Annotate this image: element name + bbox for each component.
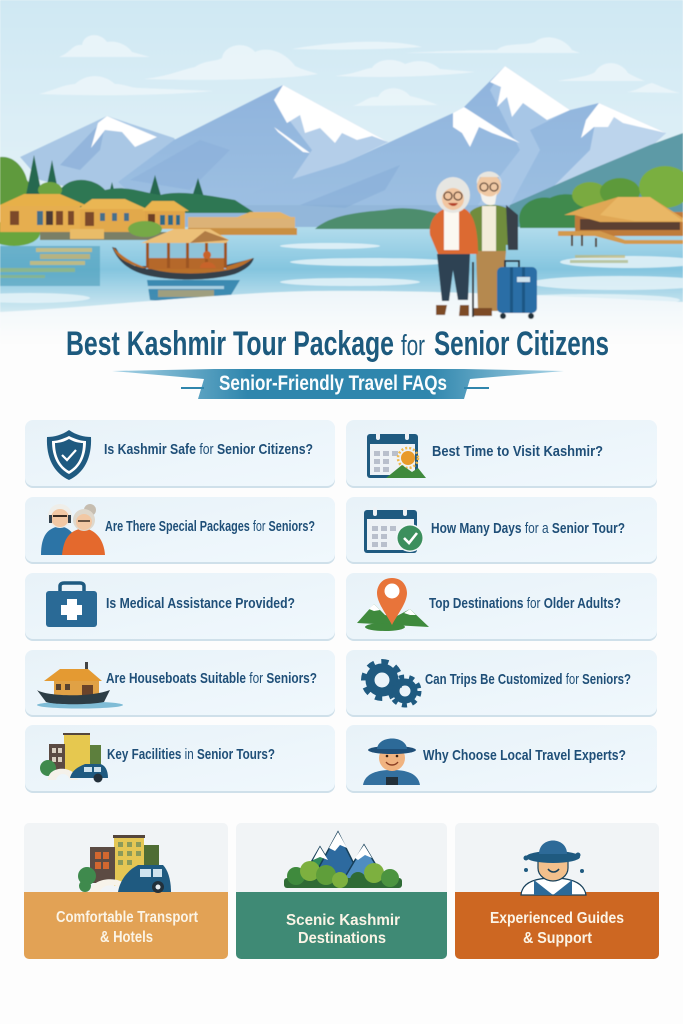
FAQ panel: medical	[25, 573, 335, 641]
icon: senior couple	[41, 504, 105, 555]
icon: houseboat	[37, 662, 123, 708]
hull	[112, 247, 254, 280]
bottom card: transport and hotels	[24, 823, 228, 959]
caption: Comfortable Transport	[56, 909, 199, 926]
tree line	[284, 861, 402, 888]
caption	[286, 912, 400, 947]
FAQ panel: local experts	[346, 725, 657, 793]
stilt house right	[558, 197, 683, 247]
subtitle ribbon	[112, 369, 564, 399]
icon: guide	[363, 738, 420, 785]
icon: hotel and car	[40, 733, 108, 782]
icon: medical kit	[46, 583, 97, 627]
caption: & Hotels	[100, 929, 153, 946]
clouds	[39, 35, 680, 106]
left trees	[0, 155, 255, 246]
lakeside houses	[0, 194, 297, 240]
question: Top Destinations for Older Adults?	[429, 595, 621, 612]
question: How Many Days for a Senior Tour?	[431, 520, 625, 537]
green right hill	[500, 133, 683, 235]
bottom card: scenic destinations	[236, 823, 447, 959]
far houseboat	[188, 212, 297, 235]
woman	[430, 177, 478, 317]
caption	[56, 909, 199, 946]
icon: gears	[364, 662, 419, 705]
shikara boat	[112, 229, 254, 304]
title: Senior Citizens	[434, 325, 609, 363]
suitcase	[497, 261, 537, 319]
question: Are Houseboats Suitable for Seniors?	[106, 670, 317, 687]
bottom card: guides and support	[455, 823, 659, 959]
water highlights	[0, 243, 683, 306]
senior couple	[430, 172, 537, 319]
caption: & Support	[523, 930, 593, 947]
question: Best Time to Visit Kashmir?	[432, 443, 603, 460]
FAQ panel: best time	[346, 420, 657, 488]
right trees	[519, 166, 683, 228]
FAQ panel: customization	[346, 650, 657, 717]
caption: Scenic Kashmir	[286, 912, 400, 929]
icon: hotel and car	[78, 835, 171, 893]
far shore	[315, 208, 445, 229]
icon: map pin with mountains	[357, 578, 429, 631]
question: Are There Special Packages for Seniors?	[105, 518, 315, 535]
ribbon text: Senior-Friendly Travel FAQs	[219, 372, 447, 395]
reflections	[0, 246, 628, 286]
snowy foreground	[0, 291, 683, 345]
caption	[490, 910, 624, 947]
question: Is Medical Assistance Provided?	[106, 595, 295, 612]
caption: Experienced Guides	[490, 910, 624, 927]
cabin	[146, 242, 226, 269]
man	[470, 172, 518, 316]
question: Can Trips Be Customized for Seniors?	[425, 671, 631, 688]
FAQ panel: facilities	[25, 725, 335, 793]
title: Best Kashmir Tour Package	[66, 325, 394, 363]
lake	[0, 227, 683, 312]
icon: calendar with sun	[367, 431, 426, 478]
title: for	[401, 330, 425, 362]
question: Why Choose Local Travel Experts?	[423, 747, 626, 764]
caption: Destinations	[298, 930, 386, 947]
FAQ panel: houseboats	[25, 650, 335, 717]
icon: mountains	[284, 832, 402, 888]
canopy roof	[141, 229, 229, 243]
FAQ panel: safety	[25, 420, 335, 488]
hero illustration	[0, 0, 683, 345]
FAQ panel: how many days	[346, 497, 657, 564]
question: Is Kashmir Safe for Senior Citizens?	[104, 441, 313, 458]
FAQ panel: packages	[25, 497, 335, 564]
question: Key Facilities in Senior Tours?	[107, 746, 275, 763]
mountains	[20, 66, 683, 235]
icon: calendar with check	[364, 507, 424, 553]
icon: guide	[521, 840, 586, 895]
FAQ panel: destinations	[346, 573, 657, 641]
sky	[0, 0, 683, 235]
snow caps	[91, 66, 666, 153]
icon: shield	[47, 430, 91, 480]
